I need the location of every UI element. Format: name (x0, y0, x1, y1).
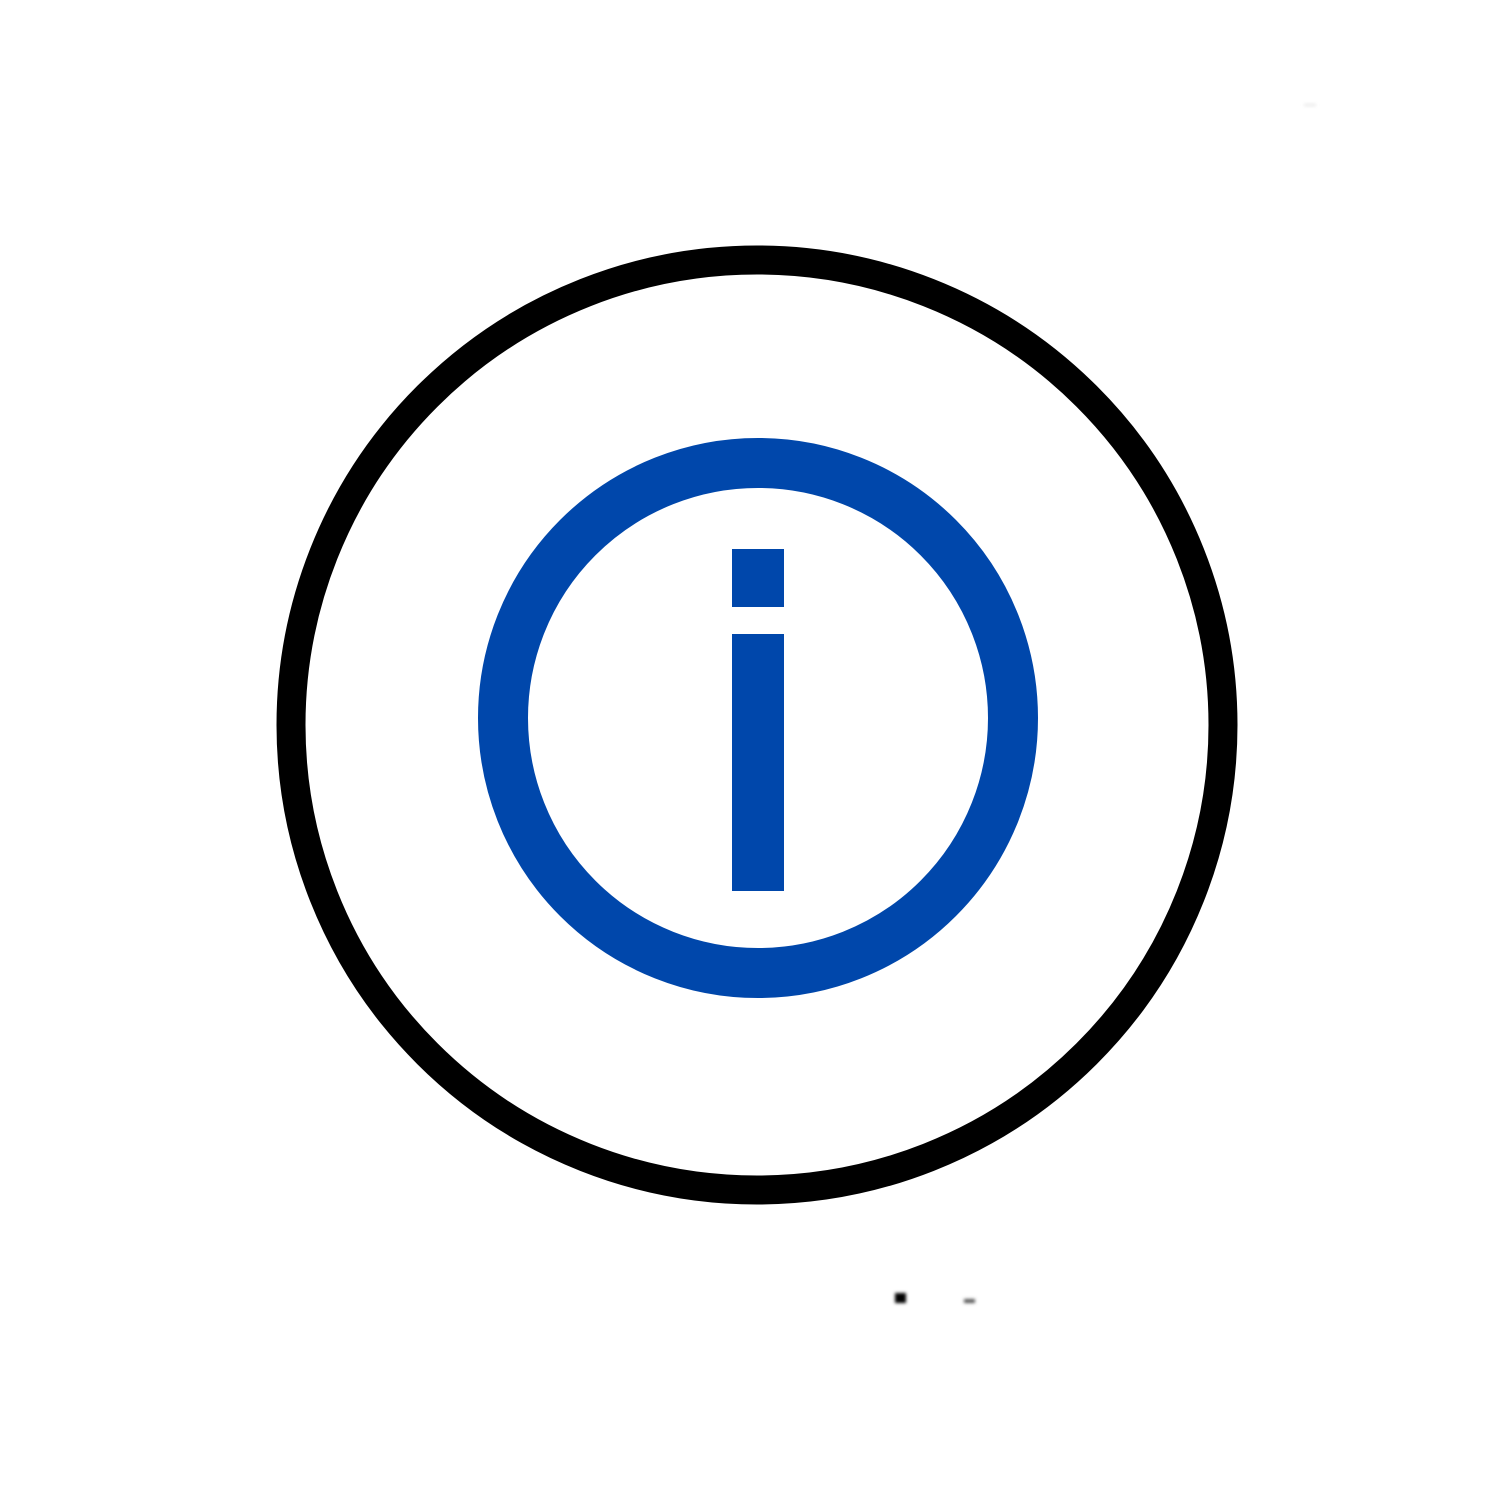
icon: inner blue ring (503, 463, 1013, 973)
icon: letter i (732, 549, 784, 891)
specks (895, 104, 1316, 1303)
icon: outer black ring (291, 260, 1223, 1190)
